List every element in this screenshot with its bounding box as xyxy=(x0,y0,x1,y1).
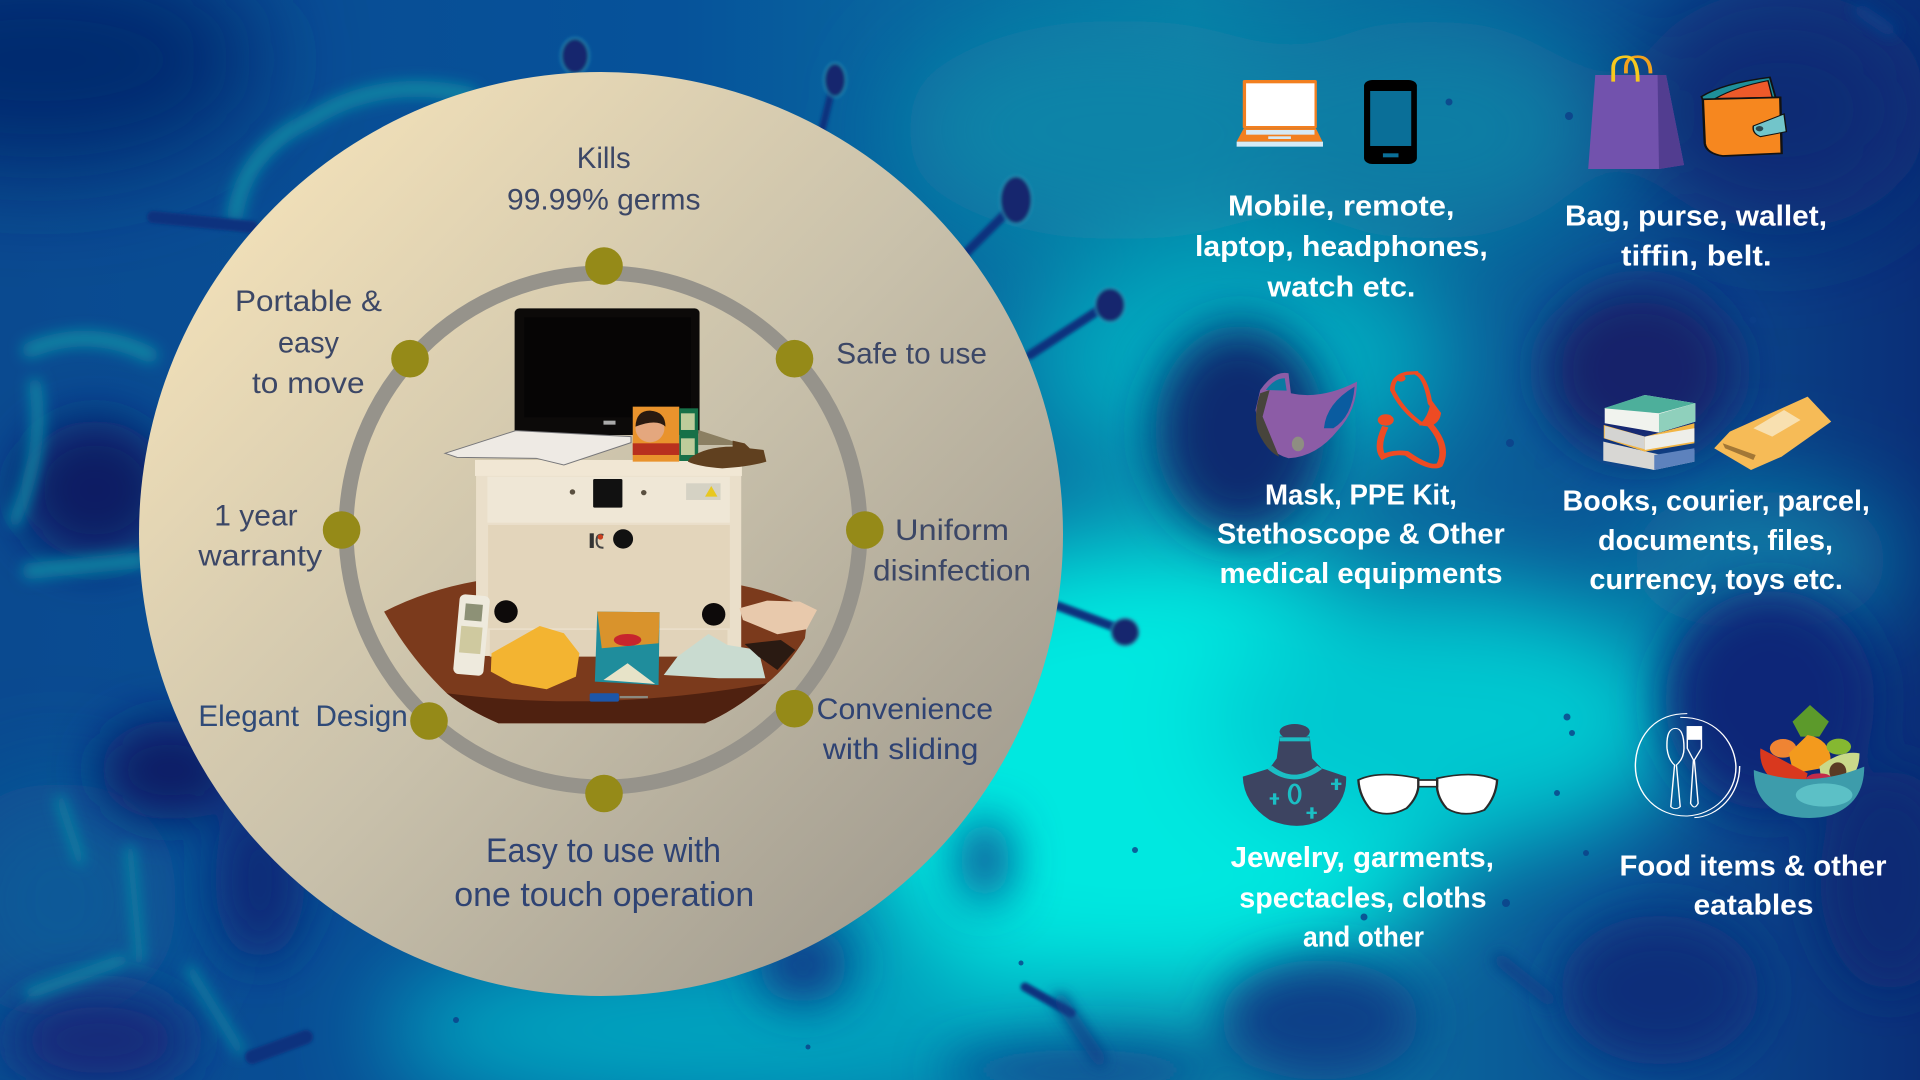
caption: medical: medical equipments xyxy=(1220,558,1502,590)
icon: shopping bag xyxy=(1588,57,1684,169)
caption: books and courier: documents, files, xyxy=(1598,525,1833,557)
label: kills germs: 99.99% germs xyxy=(507,183,700,216)
door holes xyxy=(494,600,725,626)
label: convenience xyxy=(817,693,993,766)
label: elegant design: Elegant Design xyxy=(198,700,408,733)
caption: jewelry and garments: Jewelry, garments, xyxy=(1231,842,1494,874)
icon: face mask xyxy=(1256,373,1357,458)
temperature controller xyxy=(593,479,622,508)
label: safe to use: Safe to use xyxy=(836,338,987,371)
cabinet door xyxy=(488,525,730,628)
icon group: laptop, phone, bag, wallet, mask, stethoscope, books, parcel xyxy=(1237,57,1831,470)
caution label xyxy=(686,483,721,500)
caption: electronics: watch etc. xyxy=(1266,271,1415,303)
cabinet upper panel xyxy=(487,477,730,523)
caption: electronics: Mobile, remote, xyxy=(1228,190,1454,222)
rice pillow pack xyxy=(740,601,817,634)
label: warranty xyxy=(197,499,322,573)
label: portable: Portable & xyxy=(235,285,382,318)
icon: wallet xyxy=(1701,77,1786,156)
caption: electronics: laptop, headphones, xyxy=(1195,231,1488,263)
feature ring xyxy=(346,273,860,787)
cabinet body xyxy=(476,476,741,656)
screws xyxy=(570,489,647,495)
icon: courier parcel xyxy=(1714,397,1831,470)
icon group: necklace, glasses, cutlery, fruit xyxy=(1243,705,1864,826)
label: uniform disinfection: Uniform xyxy=(895,514,1009,547)
biscuit pack xyxy=(633,407,698,462)
caption: electronics xyxy=(1195,190,1488,303)
caption: jewelry and garments xyxy=(1231,842,1494,954)
logo badges xyxy=(590,529,633,549)
caption: medical: Mask, PPE Kit, xyxy=(1265,480,1457,512)
label: uniform disinfection xyxy=(873,514,1031,587)
icon: plate and cutlery xyxy=(1635,714,1740,818)
label: easy to use: Easy to use with xyxy=(486,832,721,870)
label: uniform disinfection: disinfection xyxy=(873,554,1031,587)
laptop xyxy=(515,308,700,435)
icon: laptop xyxy=(1237,80,1323,147)
feature markers xyxy=(323,247,884,812)
cabinet lower panel xyxy=(490,630,727,657)
label: warranty: warranty xyxy=(197,540,322,573)
cabinet top slab xyxy=(475,460,742,476)
brown gloves xyxy=(688,441,766,468)
surgical mask xyxy=(664,634,765,678)
label: kills germs: Kills xyxy=(577,142,631,175)
label: convenience: with sliding xyxy=(822,733,978,766)
tablet under gloves xyxy=(698,430,743,445)
label: warranty: 1 year xyxy=(214,499,298,532)
label: convenience: Convenience xyxy=(817,693,993,726)
label: easy to use: one touch operation xyxy=(454,876,754,914)
caption: bags: Bag, purse, wallet, xyxy=(1565,200,1827,232)
icon: book stack xyxy=(1603,395,1695,470)
icon: necklace bust xyxy=(1243,724,1346,826)
caption: jewelry and garments: and other xyxy=(1303,922,1424,954)
caption: books and courier: Books, courier, parcel, xyxy=(1562,486,1870,518)
table front edge xyxy=(447,683,767,723)
snack packet xyxy=(595,612,660,685)
icon: fruit bowl xyxy=(1754,705,1864,818)
product photo: cabinet with household items on a table xyxy=(384,308,817,723)
caption: food xyxy=(1620,850,1886,922)
caption: bags xyxy=(1565,200,1827,273)
keys xyxy=(590,693,648,702)
icon: spectacles xyxy=(1358,775,1497,814)
paper files xyxy=(445,431,631,465)
label: easy to use xyxy=(454,832,754,914)
label: portable xyxy=(235,285,382,400)
label: portable: easy xyxy=(278,327,339,360)
phone xyxy=(745,640,795,670)
label: portable: to move xyxy=(252,367,365,400)
panel: feature wheel disc xyxy=(139,72,1063,996)
caption: food: Food items & other xyxy=(1620,850,1886,882)
icon: stethoscope xyxy=(1378,373,1443,466)
caption: medical xyxy=(1217,480,1505,590)
remote control xyxy=(453,594,490,676)
label: kills germs xyxy=(507,142,700,216)
caption: books and courier: currency, toys etc. xyxy=(1589,564,1843,596)
caption: medical: Stethoscope & Other xyxy=(1217,519,1505,551)
icon: phone xyxy=(1364,80,1417,164)
caption: food: eatables xyxy=(1694,890,1814,922)
yellow cloth mask xyxy=(491,626,579,689)
caption: jewelry and garments: spectacles, cloths xyxy=(1239,882,1487,914)
caption: books and courier xyxy=(1562,486,1870,596)
table xyxy=(384,581,808,723)
caption: bags: tiffin, belt. xyxy=(1621,241,1772,273)
